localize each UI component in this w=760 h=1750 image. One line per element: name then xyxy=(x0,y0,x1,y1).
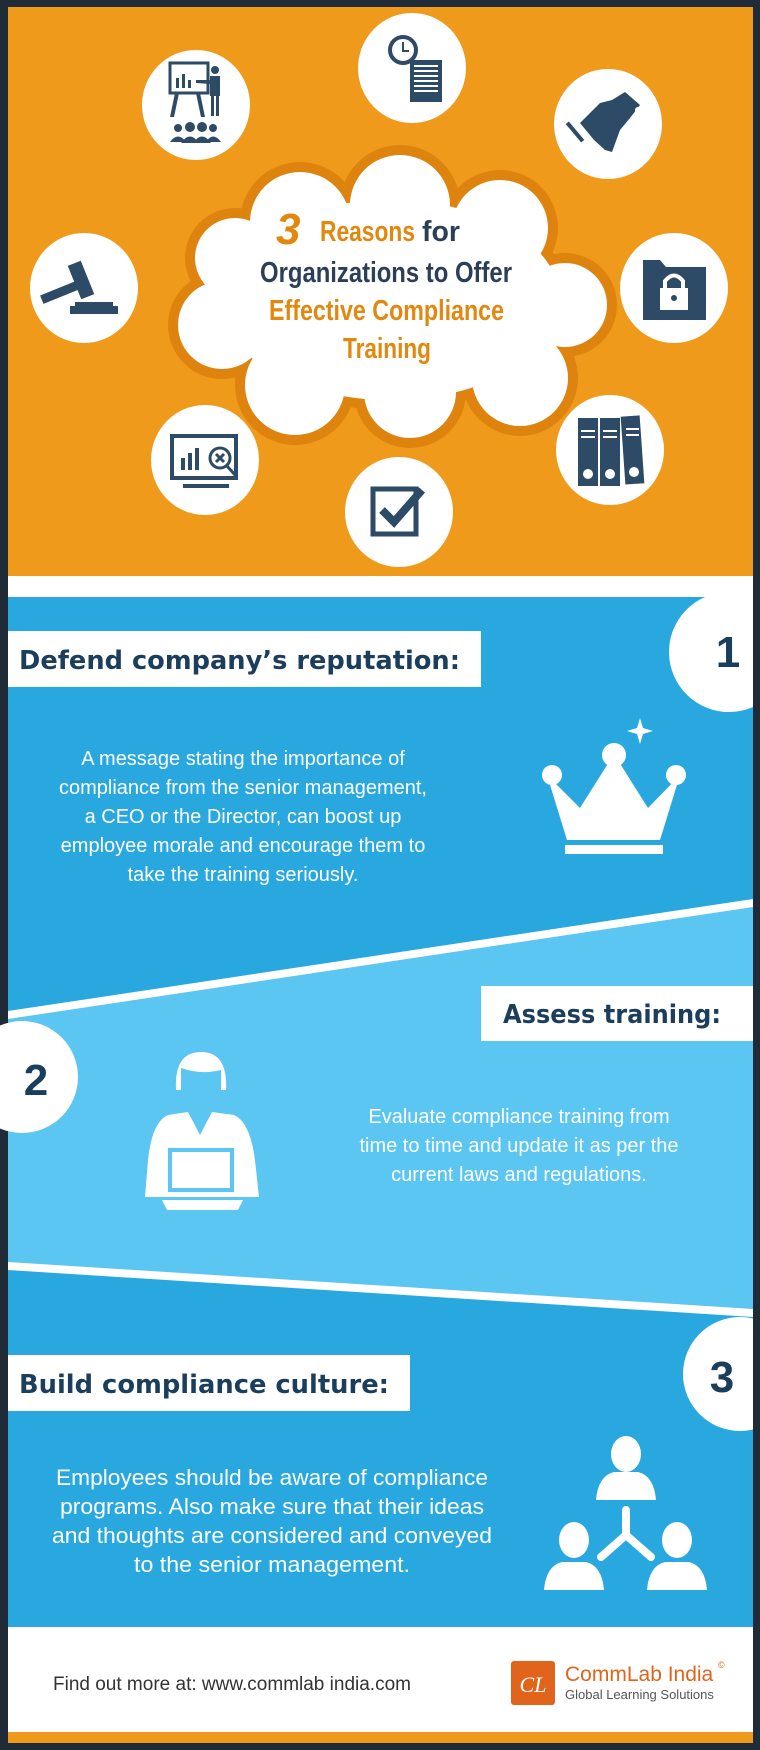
icon: crown xyxy=(542,718,686,854)
text block 3 xyxy=(52,1465,492,1577)
icon: handshake xyxy=(554,69,662,179)
number badge 3: 3 xyxy=(710,1353,734,1402)
number badge 1: 1 xyxy=(716,628,740,677)
title: for xyxy=(422,216,460,248)
icon: locked folder xyxy=(620,233,728,343)
text block 1: a CEO or the Director, can boost up xyxy=(85,806,401,828)
heading 3: Build compliance culture: xyxy=(19,1370,389,1400)
title: Organizations to Offer xyxy=(260,257,512,289)
text block 1: compliance from the senior management, xyxy=(59,777,427,799)
text block 3: to the senior management. xyxy=(134,1552,410,1577)
title: 3 xyxy=(276,205,300,254)
icon: monitor analytics xyxy=(151,405,259,515)
text block 2 xyxy=(359,1106,679,1186)
logo: © xyxy=(718,1660,725,1670)
logo: CommLab India xyxy=(565,1663,714,1686)
logo: CL xyxy=(520,1672,546,1697)
heading 2 xyxy=(481,986,753,1041)
title: Training xyxy=(343,333,431,365)
cloud xyxy=(168,145,617,448)
text block 1: take the training seriously. xyxy=(128,864,358,886)
icon: people hierarchy xyxy=(544,1436,707,1590)
text block 3: and thoughts are considered and conveyed xyxy=(52,1523,492,1548)
text block 2: current laws and regulations. xyxy=(391,1164,647,1186)
logo: Global Learning Solutions xyxy=(565,1687,714,1702)
heading 1 xyxy=(8,631,481,687)
icon: presenter xyxy=(142,50,250,160)
logo xyxy=(511,1660,725,1705)
header panel xyxy=(8,7,753,576)
icon: binders xyxy=(556,395,664,505)
panel: section 3 xyxy=(8,1270,760,1627)
heading 1: Defend company’s reputation: xyxy=(19,646,460,676)
text block 3: Employees should be aware of compliance xyxy=(56,1465,488,1490)
panel: section 2 xyxy=(0,907,753,1309)
title xyxy=(260,205,512,365)
heading 2: Assess training: xyxy=(503,1000,721,1030)
heading 3 xyxy=(8,1355,410,1411)
text block 1: employee morale and encourage them to xyxy=(61,835,425,857)
number badge 1 xyxy=(669,597,753,712)
text block 2: time to time and update it as per the xyxy=(359,1135,679,1157)
footer xyxy=(8,1627,753,1743)
text block 2: Evaluate compliance training from xyxy=(368,1106,670,1128)
number badge 2: 2 xyxy=(24,1056,48,1105)
text block 3: programs. Also make sure that their ideas xyxy=(60,1494,484,1519)
number badge 2 xyxy=(0,1021,78,1133)
panel: section 1 xyxy=(8,597,753,1011)
number badge 3 xyxy=(683,1317,760,1431)
icon: gavel xyxy=(30,233,138,343)
icon: person with laptop xyxy=(145,1052,259,1210)
text block 1: A message stating the importance of xyxy=(81,748,405,770)
title: Reasons xyxy=(320,216,415,248)
title: Effective Compliance xyxy=(269,295,504,327)
footer text: Find out more at: www.commlab india.com xyxy=(53,1674,411,1695)
icon: clock document xyxy=(358,13,466,123)
icon: checkbox xyxy=(345,457,453,567)
text block 1 xyxy=(59,748,427,886)
